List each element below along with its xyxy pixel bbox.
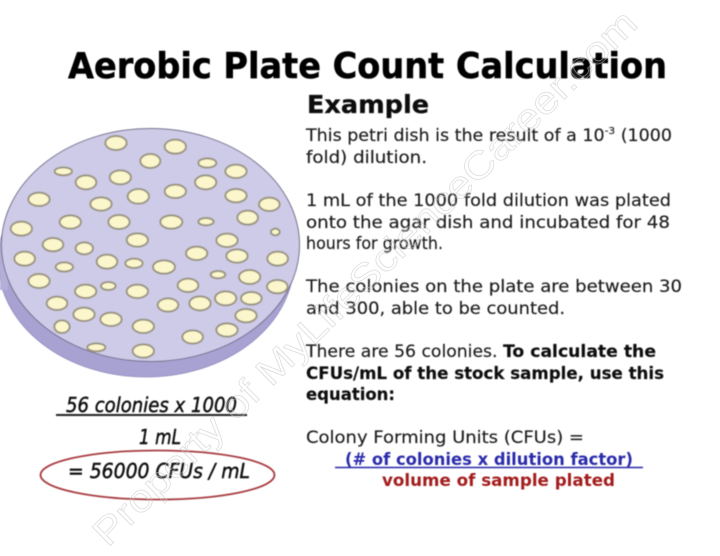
text block: instruction: CFUs/mL of the stock sample, use this [306,364,664,383]
dish left edge stub [0,240,8,290]
text block: countable range: and 300, able to be counted. [306,299,565,318]
text block: plating [306,191,671,253]
handwritten calculation: 1 mL [139,425,181,449]
text block: dilution: -3 [605,126,615,137]
text block: dilution [305,126,672,167]
title: Aerobic Plate Count Calculation [68,46,667,87]
text block: countable range: The colonies on the plate are between 30 [305,277,682,296]
text block: plating: hours for growth. [306,234,443,253]
watermark: Property of MyLifeScienceCareer.com [85,2,646,554]
icon: petri dish with colonies [0,128,300,377]
colonies [11,136,288,358]
text block: instruction: equation: [306,385,395,404]
text block: dilution: (1000 [615,126,672,145]
callout: answer circled [40,450,274,500]
heading: example: Example [307,90,429,119]
text block: CFU equation: (# of colonies x dilution factor) [345,450,633,470]
text block: instruction [305,342,664,404]
text block: CFU equation [306,428,643,491]
text block: CFU equation: Colony Forming Units (CFUs) = [306,428,584,447]
text block: countable range [305,277,682,318]
text block: plating: 1 mL of the 1000 fold dilution was plated [306,191,671,210]
handwritten calculation [40,393,274,500]
text block: instruction: There are 56 colonies. To calculate the [305,342,656,361]
dish top surface [2,128,300,362]
text block: dilution: fold) dilution. [306,148,427,167]
text block: CFU equation: volume of sample plated [382,471,615,491]
text block: dilution: This petri dish is the result of a 10 [306,126,588,145]
handwritten calculation: = 56000 CFUs / mL [68,459,250,483]
handwritten calculation: 56 colonies x 1000 [66,393,237,417]
text block: plating: onto the agar dish and incubated for 48 [306,213,670,232]
dish side wall [0,145,294,377]
